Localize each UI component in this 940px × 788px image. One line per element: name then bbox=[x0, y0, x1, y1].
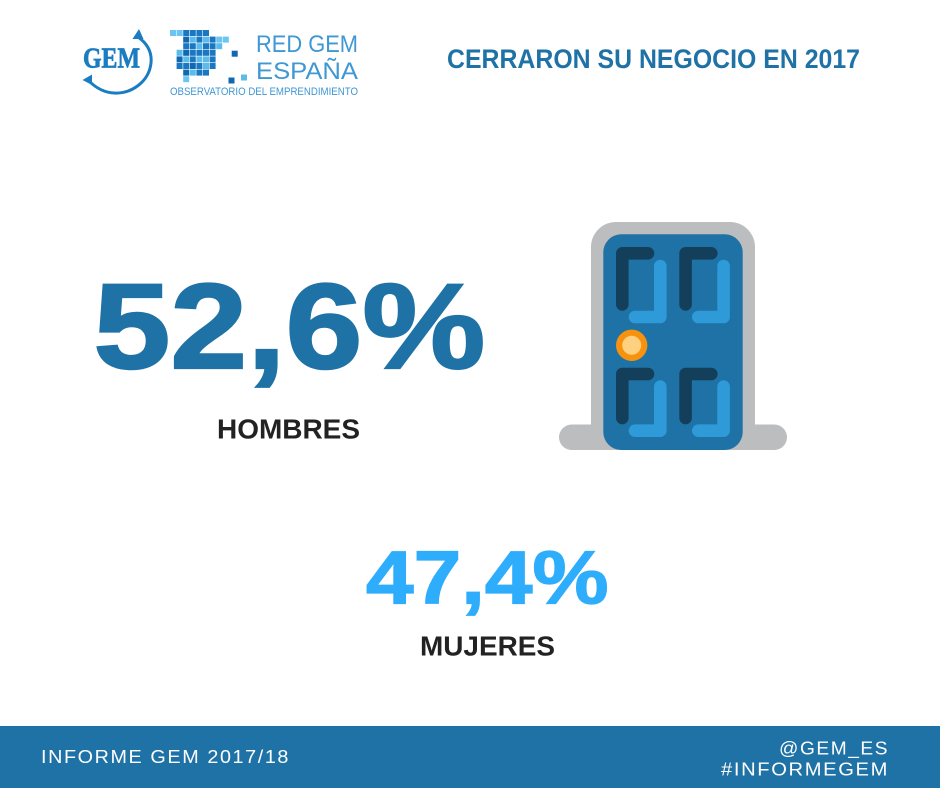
logo wordmark bbox=[170, 31, 358, 98]
label: men: HOMBRES bbox=[217, 414, 360, 444]
statistic: women percentage: 47,4% bbox=[366, 536, 609, 620]
pixel map of Spain bbox=[170, 30, 247, 84]
door frame and floor bbox=[559, 222, 787, 450]
door knob bbox=[616, 330, 647, 361]
title: CERRARON SU NEGOCIO EN 2017 bbox=[447, 44, 860, 74]
logo: GEM bbox=[82, 29, 151, 93]
logo wordmark: RED GEM bbox=[256, 31, 358, 58]
logo wordmark: ESPAÑA bbox=[256, 58, 358, 85]
icon: closed door bbox=[559, 222, 787, 450]
footer: report name: INFORME GEM 2017/18 bbox=[41, 746, 290, 767]
footer: social handles: #INFORMEGEM bbox=[721, 758, 889, 780]
label: women: MUJERES bbox=[420, 630, 555, 662]
footer bar bbox=[0, 726, 940, 788]
door panels: highlights bbox=[635, 266, 724, 431]
logo: Red GEM España bbox=[170, 30, 358, 98]
door leaf bbox=[603, 234, 743, 450]
logo wordmark: OBSERVATORIO DEL EMPRENDIMIENTO bbox=[170, 86, 358, 98]
statistic: men percentage: 52,6% bbox=[94, 258, 485, 394]
logo: GEM: GEM bbox=[83, 42, 140, 74]
door panels: shadows bbox=[622, 253, 711, 418]
footer: social handles bbox=[721, 738, 889, 780]
footer: social handles: @GEM_ES bbox=[779, 738, 889, 760]
